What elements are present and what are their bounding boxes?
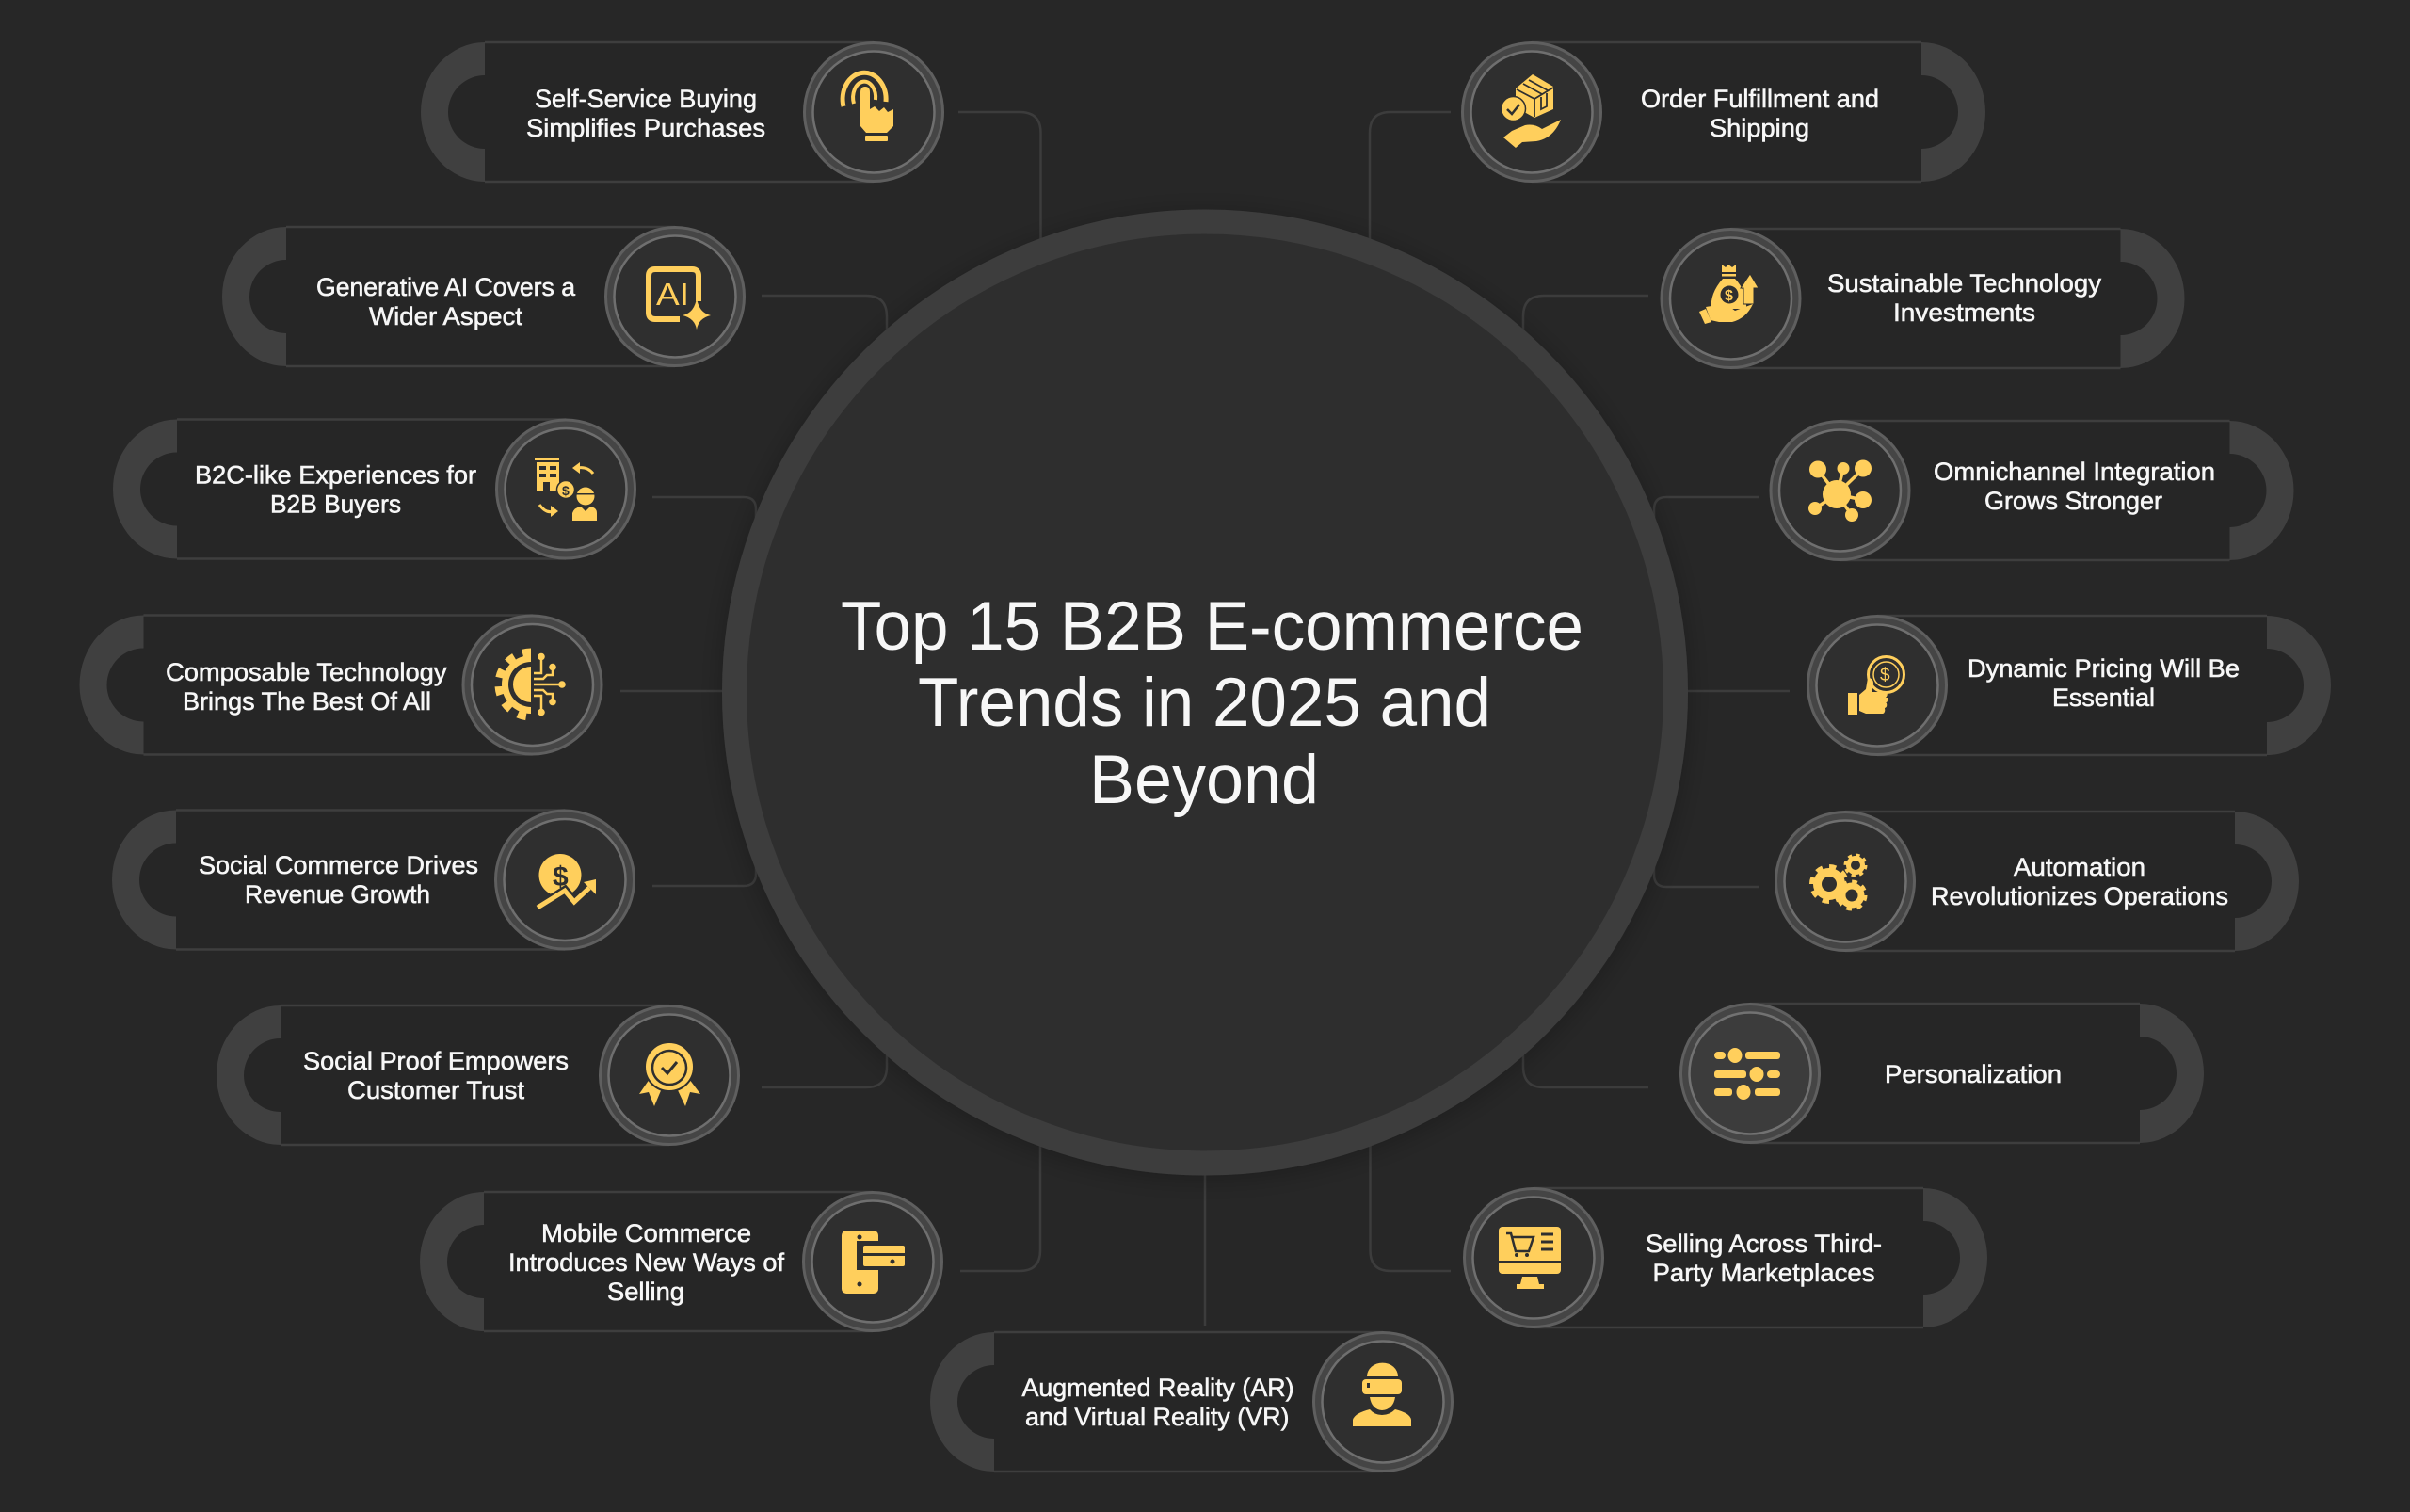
icon: money bag and hand: $ xyxy=(1725,288,1733,304)
item: Selling Across Marketplaces: Party Marketplaces xyxy=(1653,1259,1875,1287)
item: Order Fulfillment: Shipping xyxy=(1710,114,1809,142)
item: Composable Technology: Brings The Best Of All xyxy=(183,687,431,716)
item: B2C-like Experiences xyxy=(113,420,635,559)
item: Dynamic Pricing: Dynamic Pricing Will Be xyxy=(1968,654,2240,683)
item: Generative AI: Wider Aspect xyxy=(369,302,523,330)
item: Order Fulfillment: Order Fulfillment and xyxy=(1641,85,1879,113)
item: Automation xyxy=(1775,812,2299,951)
item: Mobile Commerce: Mobile Commerce xyxy=(541,1219,751,1247)
item: Augmented Reality: Augmented Reality (AR) xyxy=(1022,1374,1293,1402)
icon: thumb and coin xyxy=(1848,657,1904,715)
item: Social Proof: Social Proof Empowers xyxy=(303,1047,569,1075)
item: Automation: Revolutionizes Operations xyxy=(1931,882,2228,910)
item: Social Proof: Customer Trust xyxy=(347,1076,525,1104)
item: Omnichannel Integration: Grows Stronger xyxy=(1984,487,2162,515)
icon: monitor with cart xyxy=(1499,1227,1561,1289)
item: Omnichannel Integration xyxy=(1771,421,2293,560)
item: Sustainable Technology xyxy=(1662,229,2184,368)
item: Dynamic Pricing: Essential xyxy=(2052,684,2155,712)
item: Self-Service Buying: Simplifies Purchases xyxy=(526,114,765,142)
item: Generative AI: Generative AI Covers a xyxy=(316,273,575,301)
item: Dynamic Pricing xyxy=(1808,616,2331,755)
item: Mobile Commerce xyxy=(420,1192,941,1331)
item: Mobile Commerce: Introduces New Ways of xyxy=(508,1248,785,1277)
icon: award rosette xyxy=(639,1042,700,1106)
icon: money bag and hand xyxy=(1699,265,1759,324)
icon: building and buyer exchange: $ xyxy=(562,483,570,498)
item: Generative AI xyxy=(222,227,744,366)
item: Personalization xyxy=(1681,1004,2204,1143)
item: Order Fulfillment xyxy=(1463,42,1985,182)
item: B2C-like Experiences: B2C-like Experiences for xyxy=(195,461,476,490)
item: Augmented Reality xyxy=(930,1332,1452,1472)
item: B2C-like Experiences: B2B Buyers xyxy=(270,490,401,518)
item: Composable Technology: Composable Technology xyxy=(166,658,447,686)
icon: touch hand xyxy=(843,72,893,141)
icon: package on hand xyxy=(1501,74,1561,148)
item: Augmented Reality: and Virtual Reality (VR) xyxy=(1025,1403,1290,1431)
central circle xyxy=(734,222,1676,1164)
title: Trends in 2025 and xyxy=(918,665,1491,741)
item: Selling Across Marketplaces xyxy=(1465,1188,1987,1327)
icon: coin and growth arrow xyxy=(535,854,596,909)
item: Self-Service Buying: Self-Service Buying xyxy=(535,85,757,113)
item: Automation: Automation xyxy=(2014,853,2145,881)
icon: coin and growth arrow: $ xyxy=(553,861,569,893)
item: Sustainable Technology: Investments xyxy=(1893,298,2035,327)
item: Self-Service Buying xyxy=(421,42,943,182)
icon: thumb and coin: $ xyxy=(1880,666,1890,685)
icon: AI spark: AI xyxy=(656,277,689,312)
icon: gears xyxy=(1811,855,1866,909)
item: Social Commerce: Revenue Growth xyxy=(245,880,430,909)
icon: network hub xyxy=(1808,459,1872,522)
item: Mobile Commerce: Selling xyxy=(607,1278,684,1306)
title: Top 15 B2B E-commerce xyxy=(841,588,1583,665)
item: Social Commerce xyxy=(112,810,635,949)
title: Beyond xyxy=(1089,742,1319,818)
icon: phone and card xyxy=(842,1231,905,1294)
item: Selling Across Marketplaces: Selling Across Third- xyxy=(1646,1230,1882,1258)
icon: VR headset person xyxy=(1353,1363,1411,1426)
title xyxy=(841,588,1583,818)
item: Social Proof xyxy=(217,1005,738,1145)
item: Sustainable Technology: Sustainable Technology xyxy=(1827,269,2102,298)
connector lines xyxy=(620,112,1790,1326)
icon: building and buyer exchange xyxy=(535,458,597,521)
item: Omnichannel Integration: Omnichannel Integration xyxy=(1934,458,2215,486)
icon: half gear with circuit xyxy=(499,652,566,716)
icon: sliders xyxy=(1714,1048,1780,1100)
item: Personalization: Personalization xyxy=(1885,1060,2062,1088)
icon: AI spark xyxy=(649,269,711,330)
item: Composable Technology xyxy=(79,616,602,755)
item: Social Commerce: Social Commerce Drives xyxy=(199,851,478,879)
